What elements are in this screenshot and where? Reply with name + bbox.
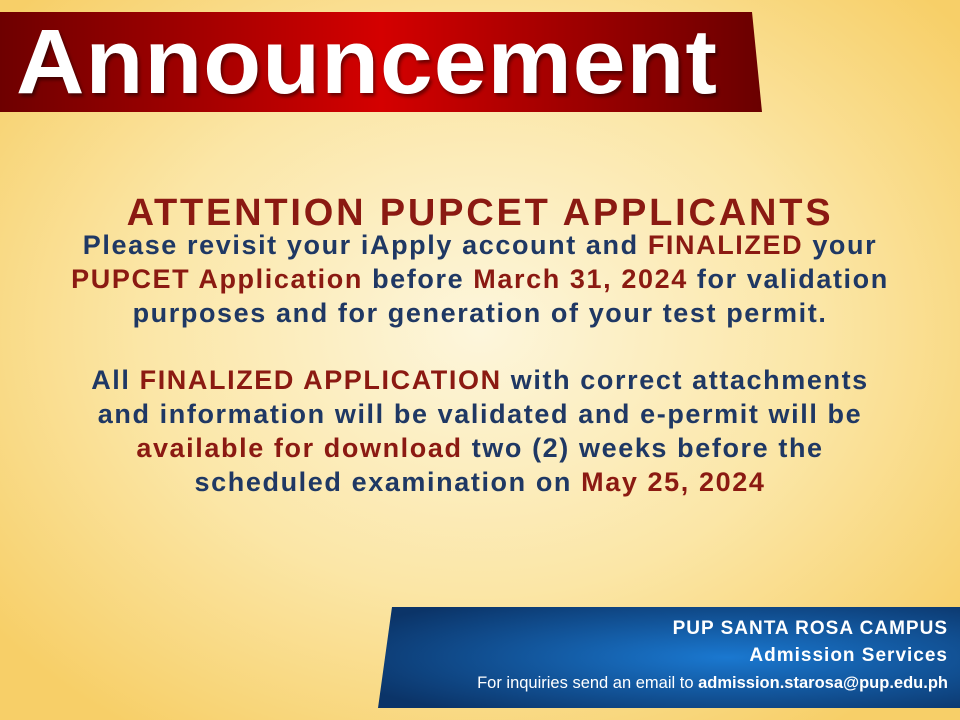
- paragraph 2: and information will be validated and e-permit will be: [98, 399, 862, 429]
- heading: ATTENTION PUPCET APPLICANTS: [127, 192, 833, 234]
- paragraph 1: PUPCET Application before March 31, 2024 for validation: [71, 264, 889, 294]
- footer text: [477, 618, 948, 692]
- paragraph 2: All FINALIZED APPLICATION with correct attachments: [91, 365, 869, 395]
- paragraph 1: purposes and for generation of your test permit.: [133, 298, 827, 328]
- paragraph 1: Please revisit your iApply account and FINALIZED your: [83, 230, 877, 260]
- footer text: For inquiries send an email to admission.starosa@pup.edu.ph: [477, 674, 948, 692]
- paragraph 2: available for download two (2) weeks before the: [136, 433, 824, 463]
- banner: Announcement: [0, 11, 762, 113]
- paragraph 2: scheduled examination on May 25, 2024: [195, 467, 765, 497]
- footer text: PUP SANTA ROSA CAMPUS: [673, 618, 948, 639]
- main text block: [71, 192, 889, 497]
- footer: contact panel: [378, 607, 960, 708]
- paragraph 2: [91, 365, 869, 497]
- title: Announcement: [16, 11, 718, 113]
- paragraph 1: [71, 230, 889, 328]
- footer text: Admission Services: [749, 645, 948, 666]
